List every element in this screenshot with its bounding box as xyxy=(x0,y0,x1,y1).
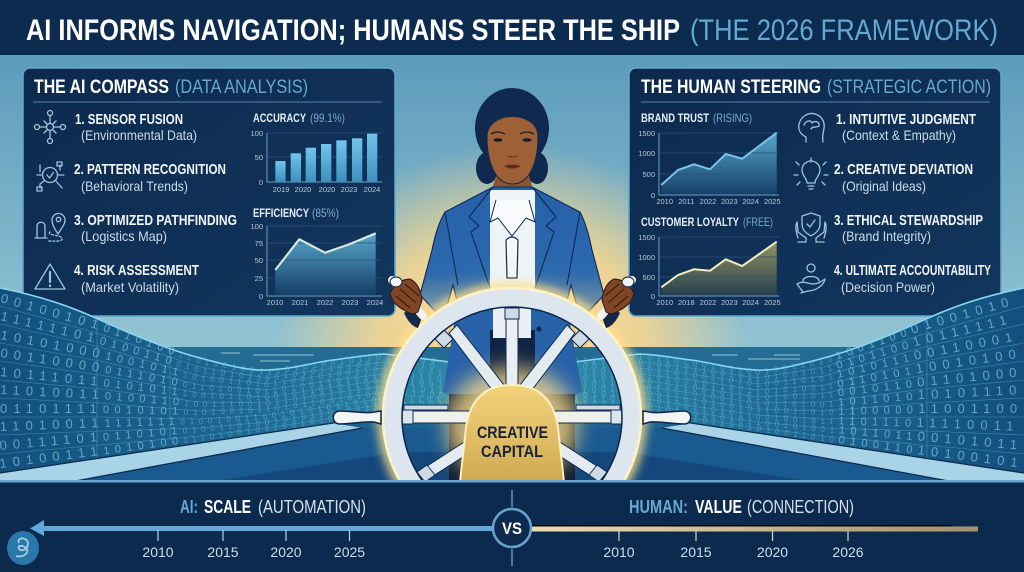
binary data wave: left: 00110000011101001101001011010011010110010110 xyxy=(1,348,441,394)
glow behind wheel xyxy=(383,288,641,546)
AI scale heading: AI: xyxy=(180,497,198,517)
binary data wave: right: 10100101101001011001101010011011010110010100 xyxy=(583,350,1016,394)
binary data wave: left: 11111101010011001011010110010101101001011010 xyxy=(1,312,434,381)
item: pattern recognition: 2. PATTERN RECOGNITION xyxy=(74,161,226,178)
VS badge: VS xyxy=(502,519,522,538)
icon: light bulb xyxy=(794,158,828,189)
hub: creative capital: CREATIVE xyxy=(477,423,548,442)
bar chart: accuracy: 2023 xyxy=(341,185,357,194)
binary data wave: left: 10111011010101110010110100101101011001101001 xyxy=(1,367,442,400)
area chart: efficiency: 2023 xyxy=(342,298,358,307)
binary data wave: left xyxy=(0,287,449,472)
area chart: customer loyalty: 2025 xyxy=(764,298,781,307)
panel: the AI compass xyxy=(23,68,395,316)
binary data wave: right: 01101001011010011010100110101101011100110001 xyxy=(584,332,1012,388)
area chart: efficiency: (85%) xyxy=(312,206,339,220)
title bar xyxy=(0,0,1024,55)
binary data wave: right: 10101001101001011001010011010010011010100101 xyxy=(575,405,1016,467)
area chart: brand trust: BRAND TRUST xyxy=(641,111,710,125)
area chart: customer loyalty: CUSTOMER LOYALTY xyxy=(641,215,739,229)
shirt and tie xyxy=(490,190,535,292)
area chart: customer loyalty: 2023 xyxy=(721,298,738,307)
bottom comparison bar xyxy=(0,480,1024,572)
binary data wave: right: 01001011010100110101100101001101101100101011 xyxy=(575,400,1016,450)
human value heading: HUMAN: xyxy=(629,497,688,517)
area chart: brand trust: 2010 xyxy=(656,197,673,206)
item: ultimate accountability: (Decision Power) xyxy=(841,279,935,295)
area chart: efficiency: 2024 xyxy=(367,298,383,307)
title bar: AI INFORMS NAVIGATION; HUMANS STEER THE SHIP xyxy=(26,14,680,47)
AI timeline arrow: 2010 xyxy=(142,544,174,560)
area chart: brand trust: 2024 xyxy=(742,197,759,206)
spokes xyxy=(402,308,622,482)
panel heading: THE HUMAN STEERING xyxy=(641,77,821,98)
area chart: customer loyalty: 1000 xyxy=(638,253,655,262)
item: risk assessment: (Market Volatility) xyxy=(81,279,179,295)
panel heading: (DATA ANALYSIS) xyxy=(175,77,308,98)
item: ethical stewardship xyxy=(834,212,983,244)
icon: optimized pathfinding xyxy=(35,214,65,241)
human timeline bar: 2026 xyxy=(832,544,864,560)
item: ethical stewardship: 3. ETHICAL STEWARDSHIP xyxy=(834,212,983,229)
outer handle: right xyxy=(643,411,691,424)
icon: person over open hand xyxy=(797,264,825,293)
binary data wave: right: 00101101001101010010110011010110000011001100 xyxy=(575,390,1017,416)
panel heading xyxy=(33,77,382,102)
panel: the human steering xyxy=(629,68,1001,316)
ship wheel xyxy=(332,286,692,480)
human timeline bar: 2010 xyxy=(603,544,635,560)
lapels xyxy=(445,187,580,288)
area chart: efficiency: 0 xyxy=(259,292,263,301)
area chart: brand trust: 2023 xyxy=(721,197,738,206)
area chart: customer loyalty: (FREE) xyxy=(743,215,773,229)
area chart: efficiency: 25 xyxy=(255,274,263,283)
item: sensor fusion xyxy=(75,111,197,143)
rim xyxy=(392,298,632,536)
AI timeline arrow: 2025 xyxy=(334,544,365,560)
area chart: customer loyalty: 0 xyxy=(651,292,655,301)
area chart: brand trust: 2025 xyxy=(764,197,781,206)
item: pattern recognition: (Behavioral Trends) xyxy=(81,178,188,194)
item: risk assessment: 4. RISK ASSESSMENT xyxy=(74,262,199,279)
bar chart: accuracy: 2020 xyxy=(319,185,335,194)
hair xyxy=(475,88,549,184)
human timeline bar: 2015 xyxy=(680,544,712,560)
lower jacket through wheel xyxy=(443,300,582,482)
area chart: efficiency: 2022 xyxy=(317,298,333,307)
binary data wave: left: 01101111001010101010010110101100101001101100 xyxy=(0,390,444,415)
panel heading: THE AI COMPASS xyxy=(34,77,169,98)
area chart: customer loyalty: 2024 xyxy=(742,298,759,307)
bar chart: accuracy: (99.1%) xyxy=(310,111,345,125)
item: optimized pathfinding: 3. OPTIMIZED PATHFINDING xyxy=(74,212,237,229)
item: intuitive judgment xyxy=(836,111,976,143)
area chart: customer loyalty: 500 xyxy=(642,273,655,282)
area chart: efficiency xyxy=(250,206,383,307)
bar chart: accuracy: 0 xyxy=(259,178,263,187)
icon: shield and hands xyxy=(796,213,826,242)
bar chart: accuracy xyxy=(250,111,382,194)
area chart: customer loyalty: 1500 xyxy=(638,233,655,242)
item: optimized pathfinding: (Logistics Map) xyxy=(81,228,167,244)
item: optimized pathfinding xyxy=(74,212,237,244)
area chart: efficiency: 100 xyxy=(250,222,263,231)
AI timeline arrow xyxy=(30,520,494,560)
item: risk assessment xyxy=(74,262,199,295)
item: creative deviation xyxy=(834,161,973,194)
item: intuitive judgment: 1. INTUITIVE JUDGMENT xyxy=(836,111,976,128)
icon: brain in head xyxy=(799,113,824,142)
bar chart: accuracy: ACCURACY xyxy=(253,111,306,125)
area chart: brand trust: 500 xyxy=(642,170,655,179)
area chart: brand trust: 0 xyxy=(651,191,655,200)
AI scale heading xyxy=(180,497,366,517)
area chart: efficiency: 2021 xyxy=(292,298,308,307)
icon: sensor fusion xyxy=(34,110,66,144)
binary data wave: right: 01101001011010010110010011010100110001001010 xyxy=(576,298,1008,375)
item: creative deviation: (Original Ideas) xyxy=(842,178,926,194)
area chart: efficiency: EFFICIENCY xyxy=(253,206,309,220)
area chart: brand trust: 2022 xyxy=(700,197,716,206)
bar chart: accuracy: 50 xyxy=(255,153,263,162)
AI scale heading: SCALE xyxy=(204,497,251,517)
human value heading: (CONNECTION) xyxy=(747,497,854,517)
item: intuitive judgment: (Context & Empathy) xyxy=(842,127,956,143)
area chart: brand trust: 1500 xyxy=(638,129,655,138)
figure: woman in blue blazer xyxy=(420,88,604,482)
VS badge xyxy=(493,490,531,566)
item: sensor fusion: 1. SENSOR FUSION xyxy=(75,111,183,128)
hub glow xyxy=(446,367,578,483)
bar chart: accuracy: 100 xyxy=(250,129,263,138)
binary data wave: left: 00100101011010011010010011101010010110100110 xyxy=(1,294,436,375)
bar chart: accuracy: 2024 xyxy=(364,185,380,194)
ship deck and rails xyxy=(0,422,1024,482)
area chart: customer loyalty: 2022 xyxy=(700,298,716,307)
human timeline bar xyxy=(532,525,978,560)
bar chart: accuracy: 2020 xyxy=(295,185,311,194)
binary data wave: right: 10010110100101100101101001011010110010111111 xyxy=(583,316,1007,381)
panel heading: (STRATEGIC ACTION) xyxy=(827,77,991,98)
AI timeline arrow: 2020 xyxy=(270,544,302,560)
AI timeline arrow: 2015 xyxy=(207,544,239,560)
item: creative deviation: 2. CREATIVE DEVIATION xyxy=(834,161,973,178)
neck and face xyxy=(487,116,538,200)
blazer upper xyxy=(420,187,604,312)
right hand gripping handle xyxy=(600,277,634,328)
area chart: brand trust xyxy=(638,111,781,206)
background: sky with golden horizon glow xyxy=(0,55,1024,482)
outer handle: left xyxy=(333,411,381,424)
item: sensor fusion: (Environmental Data) xyxy=(81,127,197,143)
icon: risk assessment warning triangle xyxy=(35,264,65,289)
area chart: efficiency: 50 xyxy=(255,256,263,265)
binary data wave: left: 00111101011010101001101001010110010110101001 xyxy=(0,400,441,450)
AI scale heading: (AUTOMATION) xyxy=(258,497,366,517)
left hand gripping handle xyxy=(390,277,424,328)
area chart: brand trust: 2011 xyxy=(678,197,694,206)
area chart: customer loyalty: 2018 xyxy=(678,298,695,307)
binary data wave: left: 11010011010011010011100101101001011011001011 xyxy=(1,384,442,407)
item: ultimate accountability xyxy=(834,262,991,295)
bar chart: accuracy: 2019 xyxy=(273,185,289,194)
human value heading: VALUE xyxy=(695,497,742,517)
item: ethical stewardship: (Brand Integrity) xyxy=(842,228,931,244)
area chart: efficiency: 75 xyxy=(255,239,263,248)
binary data wave: right: 01011010010110010110101001011001011001101000 xyxy=(584,368,1016,400)
binary data wave: left: 10100111101010011101001011001010011010010101 xyxy=(0,406,404,468)
area chart: customer loyalty xyxy=(638,215,781,307)
area chart: brand trust: 1000 xyxy=(638,149,655,158)
item: pattern recognition xyxy=(74,161,226,194)
binary data wave: left: 10101000100101110100110101100101001101011001 xyxy=(1,330,442,388)
panel heading xyxy=(641,77,991,102)
hub: creative capital xyxy=(460,385,564,482)
binary data wave: left: 11010011111111101001001100101010110101001101 xyxy=(1,396,440,431)
area chart: brand trust: (RISING) xyxy=(713,111,752,125)
icon: pattern recognition xyxy=(37,162,64,191)
human timeline bar: 2020 xyxy=(757,544,788,560)
binary data wave: right: 11001011010010100110101101001101101010101110 xyxy=(583,384,1016,408)
human value heading xyxy=(629,497,854,517)
hub: creative capital: CAPITAL xyxy=(481,442,543,461)
binary data wave: right xyxy=(575,287,1024,472)
area chart: customer loyalty: 2010 xyxy=(656,298,673,307)
binary data wave: right: 10110100101001101011001001011110111011110011 xyxy=(575,396,1013,430)
icon: logo badge xyxy=(7,531,39,565)
area chart: efficiency: 2010 xyxy=(267,298,283,307)
